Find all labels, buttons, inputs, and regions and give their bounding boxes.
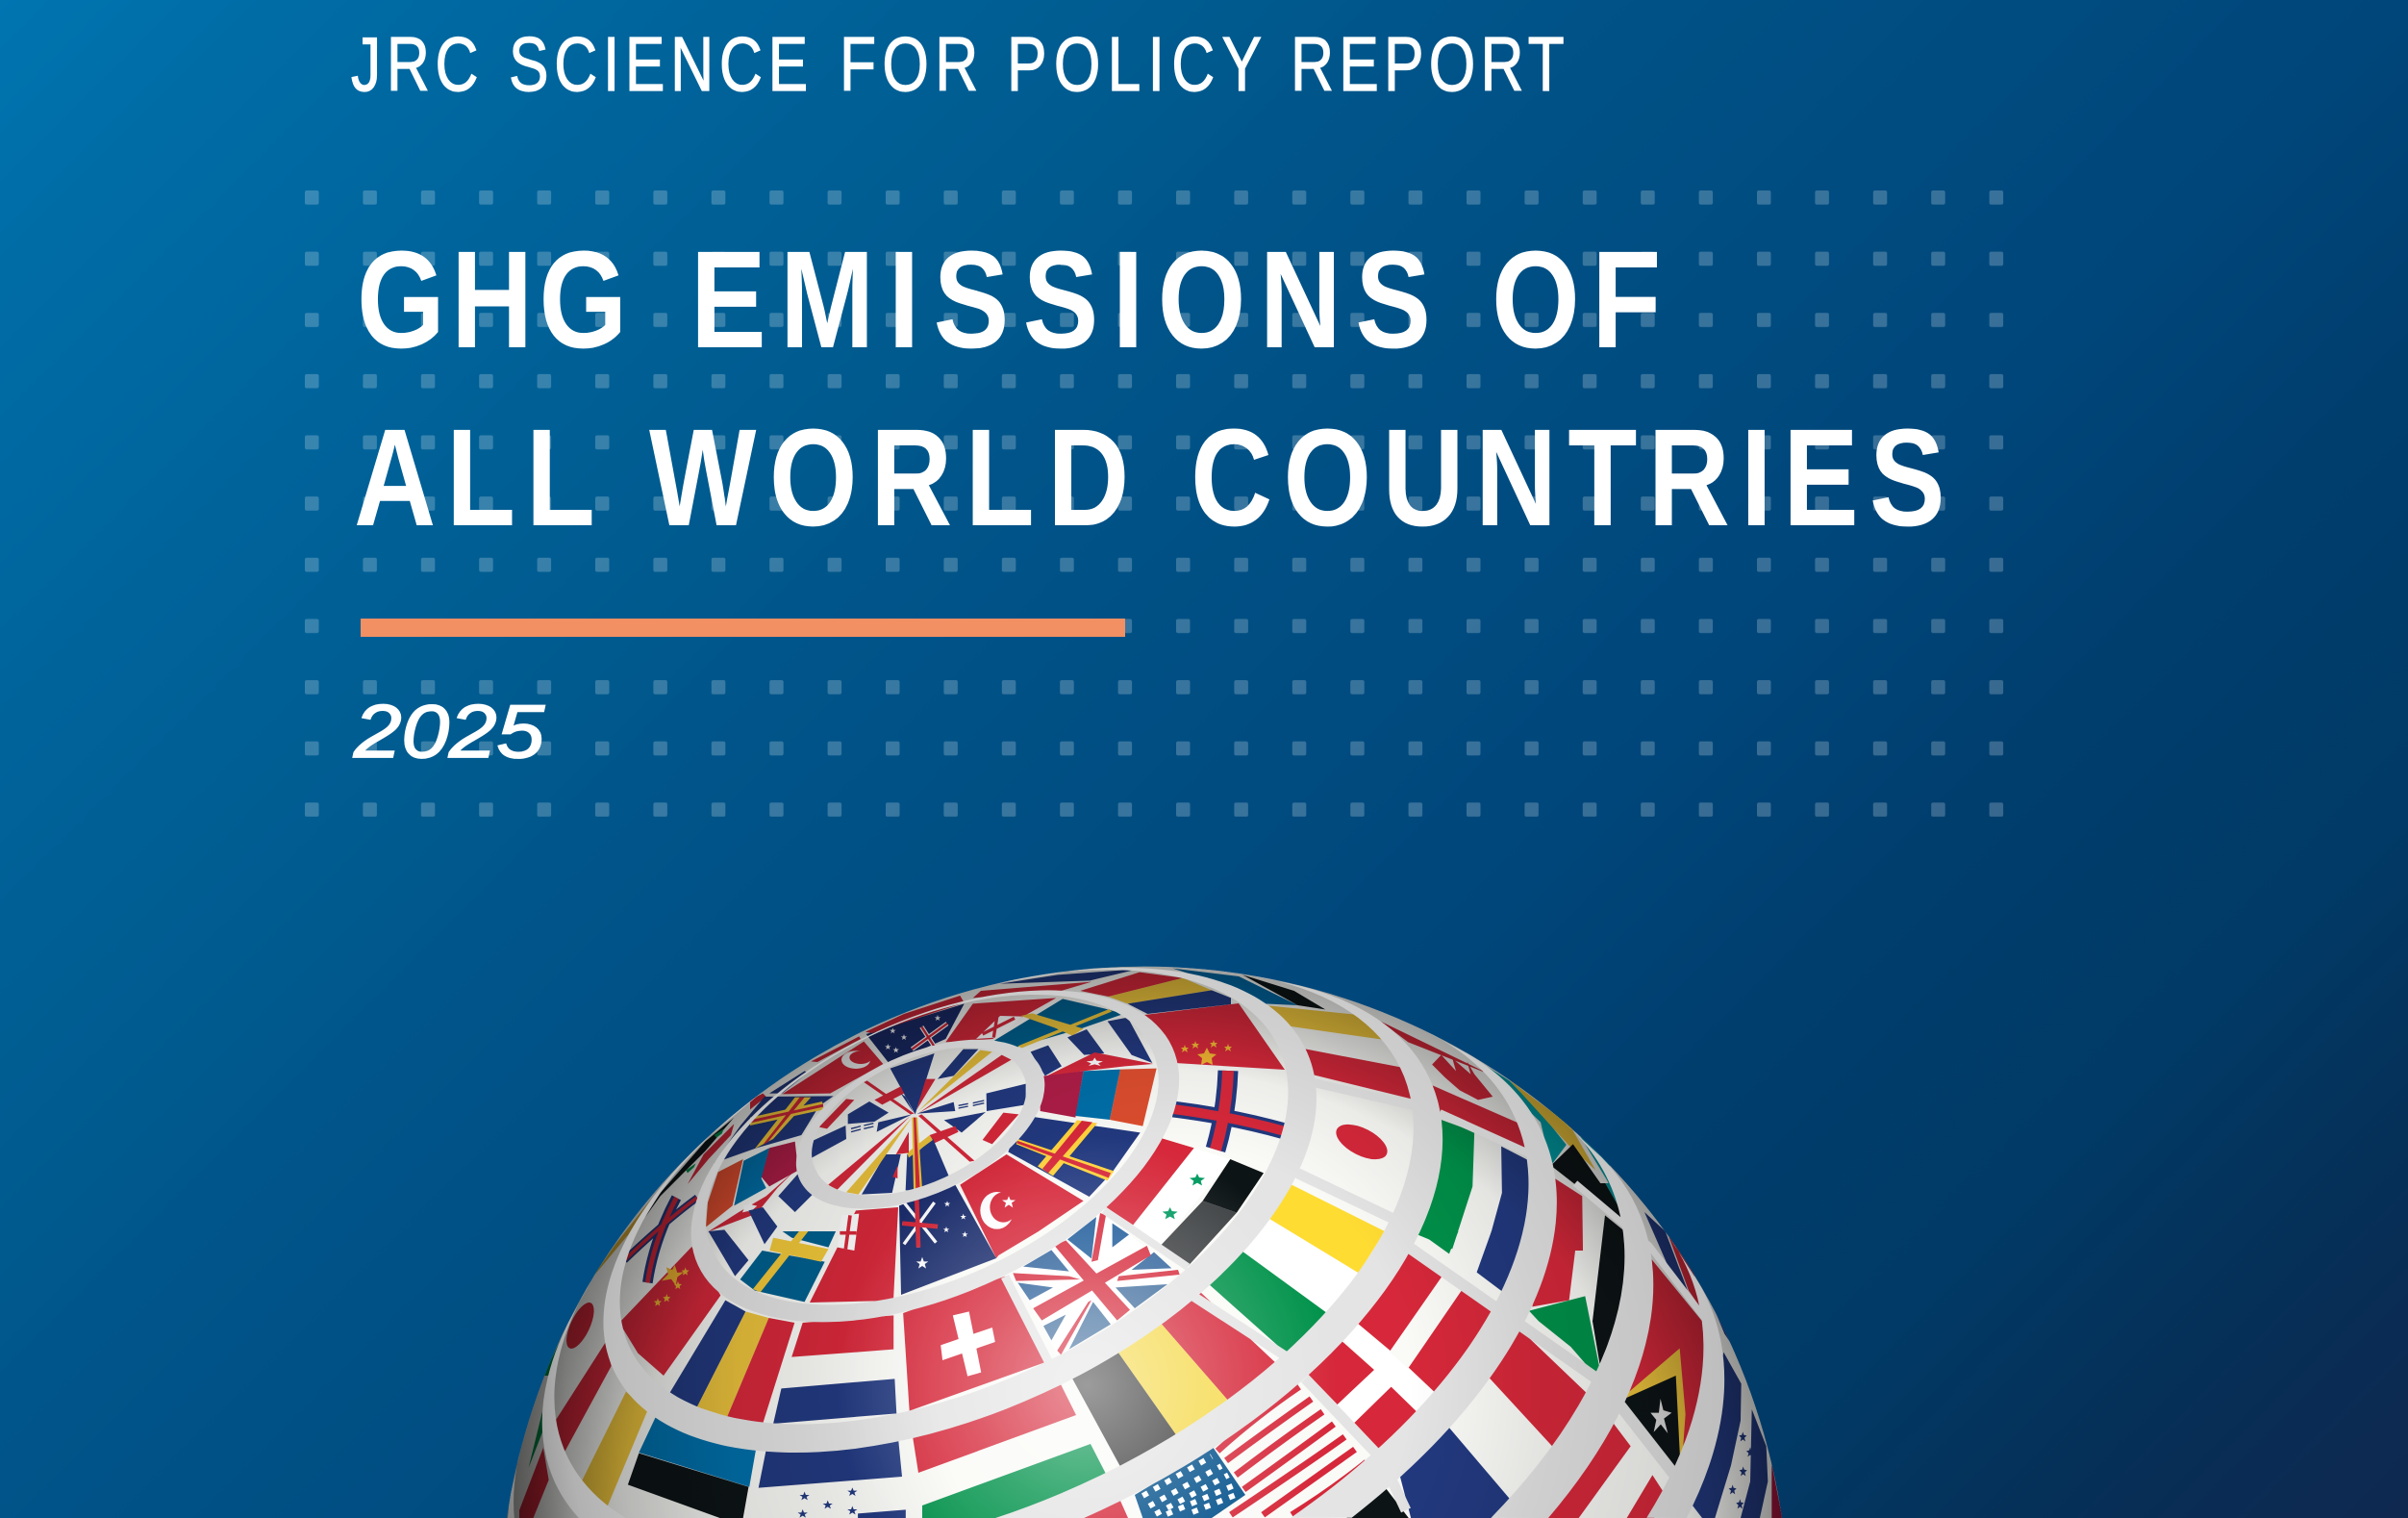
- flag: Sweden upper: [994, 999, 1123, 1048]
- flag: red white gold stripes: [552, 1342, 647, 1513]
- flag: green white blue stripes upper: [1417, 1119, 1533, 1251]
- flag: Estonia: [628, 1417, 756, 1518]
- title: ALL: [354, 400, 595, 555]
- flag: China upper: [1144, 1003, 1285, 1070]
- latitude rings: [508, 968, 1724, 1518]
- US canton: [1135, 1448, 1245, 1518]
- flag: yellow white red stripes: [1265, 1005, 1416, 1100]
- orange accent bar: [361, 619, 1125, 637]
- ring 2: [691, 990, 1179, 1322]
- flag: Faroe left: [624, 1198, 697, 1282]
- flag: red white blue diagonal: [1399, 1328, 1593, 1518]
- report label: SCIENCE: [509, 22, 808, 108]
- flag: Switzerland: [903, 1277, 1048, 1411]
- title: EMISSIONS: [690, 222, 1431, 377]
- flag: Syria sliver left: [645, 1118, 734, 1218]
- title: OF: [1492, 222, 1661, 377]
- globe of flags: [507, 962, 1782, 1518]
- flag: Greece-style stripes upper: [1031, 1018, 1152, 1075]
- flag: Greece-style stripes left: [709, 1174, 815, 1277]
- flag: Belgium: [1071, 1291, 1277, 1470]
- flag: Canada: [1381, 1022, 1533, 1154]
- report label: REPORT: [1291, 22, 1565, 108]
- flag: Georgia-style lower: [810, 1207, 898, 1303]
- flag: Sudan top red: [1547, 1176, 1583, 1251]
- ring 7: [1646, 1239, 1724, 1518]
- globe base sphere: [507, 967, 1782, 1518]
- ring 4: [542, 976, 1442, 1518]
- flag: Aland left cross: [715, 1096, 834, 1163]
- ring 1: [796, 1040, 1044, 1208]
- flag: crimson blue orange tricolour upper: [1041, 1069, 1157, 1126]
- US stars: [1142, 1456, 1239, 1514]
- report label: JRC: [351, 22, 479, 108]
- ring 6: [1491, 1120, 1653, 1518]
- report label: POLICY: [1007, 22, 1262, 108]
- year: 2025: [353, 689, 545, 773]
- flag: Japan left: [566, 1303, 594, 1349]
- flags: left limb red and green: [519, 1349, 558, 1518]
- ring 3: [603, 968, 1317, 1453]
- flags: polar disc and inner rings: [715, 969, 1231, 1303]
- flag: red lower stripes: [1539, 1420, 1670, 1518]
- flag: crimson blue orange tricolour left: [706, 1142, 798, 1227]
- flag: red yellow blue tricolour: [1080, 973, 1231, 1014]
- flag: Australia upper: [866, 1003, 965, 1064]
- flag: Bahamas at limb: [1476, 1060, 1631, 1227]
- cell dividers between flags: [1005, 1080, 1712, 1510]
- flag: white cells with red diamonds: [1309, 1248, 1499, 1455]
- dot grid pattern: [305, 190, 2004, 817]
- flag: Turkey upper left: [782, 1042, 883, 1094]
- flag: Sweden lower: [740, 1231, 836, 1302]
- flag: yellow white green: [1208, 1183, 1385, 1354]
- report label: [351, 22, 1565, 108]
- limb slivers blue and crimson: [1644, 1212, 1782, 1518]
- title: COUNTRIES: [1191, 400, 1945, 555]
- title: [354, 222, 1945, 555]
- flag: United States: [1135, 1387, 1367, 1518]
- flag: Honduras: [759, 1440, 906, 1518]
- flag: Australia lower: [899, 1185, 996, 1295]
- flag: Japan centre: [1331, 1117, 1392, 1167]
- flag: Turkey lower: [960, 1154, 1084, 1258]
- flags: centre: [1013, 1138, 1385, 1470]
- sphere highlight: [507, 967, 1782, 1518]
- pole disc wedges: [811, 1050, 1026, 1195]
- flags: limb slivers upper left: [750, 969, 1138, 1109]
- flag: United Kingdom: [1013, 1212, 1180, 1354]
- flag: red pennant with star left: [708, 1171, 794, 1232]
- flag: Timor-Leste: [1618, 1254, 1714, 1484]
- left side shading under rings: [507, 962, 769, 1518]
- flag: green white blue stripes lower: [1417, 1231, 1528, 1295]
- flag: black corner: [1346, 1487, 1409, 1518]
- flag: Honduras right: [1693, 1353, 1768, 1518]
- sphere shading: [507, 967, 1782, 1518]
- flag: Georgia-style upper: [945, 998, 1056, 1042]
- flag: Romania-style: [669, 1301, 794, 1423]
- flag: black teal sliver: [1575, 1183, 1630, 1227]
- flags: right limb: [1529, 1183, 1782, 1518]
- flag: Netherlands-style: [773, 1315, 896, 1424]
- flags: upper right: [1172, 969, 1631, 1251]
- title: WORLD: [649, 400, 1129, 555]
- flag: Faroe centre: [1173, 1071, 1285, 1150]
- flag: Aland right: [1008, 1115, 1141, 1197]
- limb slivers gold and green: [543, 1198, 652, 1376]
- flag limb shading under rings: [507, 967, 1782, 1518]
- flags: top limb teal and black: [1172, 969, 1325, 1009]
- report label: FOR: [840, 22, 978, 108]
- flags: left side: [543, 1118, 815, 1376]
- flag: Hungary: [913, 1382, 1128, 1518]
- flags: lower right: [1309, 1231, 1593, 1518]
- flag: Syria: [1106, 1138, 1264, 1267]
- flag: red pennant with star upper: [1045, 1052, 1153, 1076]
- flag: Sudan: [1529, 1183, 1633, 1383]
- flag: China left: [619, 1247, 720, 1376]
- title: GHG: [357, 222, 627, 377]
- flags: lower left: [519, 1231, 1048, 1518]
- ring 5: [508, 1031, 1557, 1518]
- US stripes: [1217, 1387, 1367, 1515]
